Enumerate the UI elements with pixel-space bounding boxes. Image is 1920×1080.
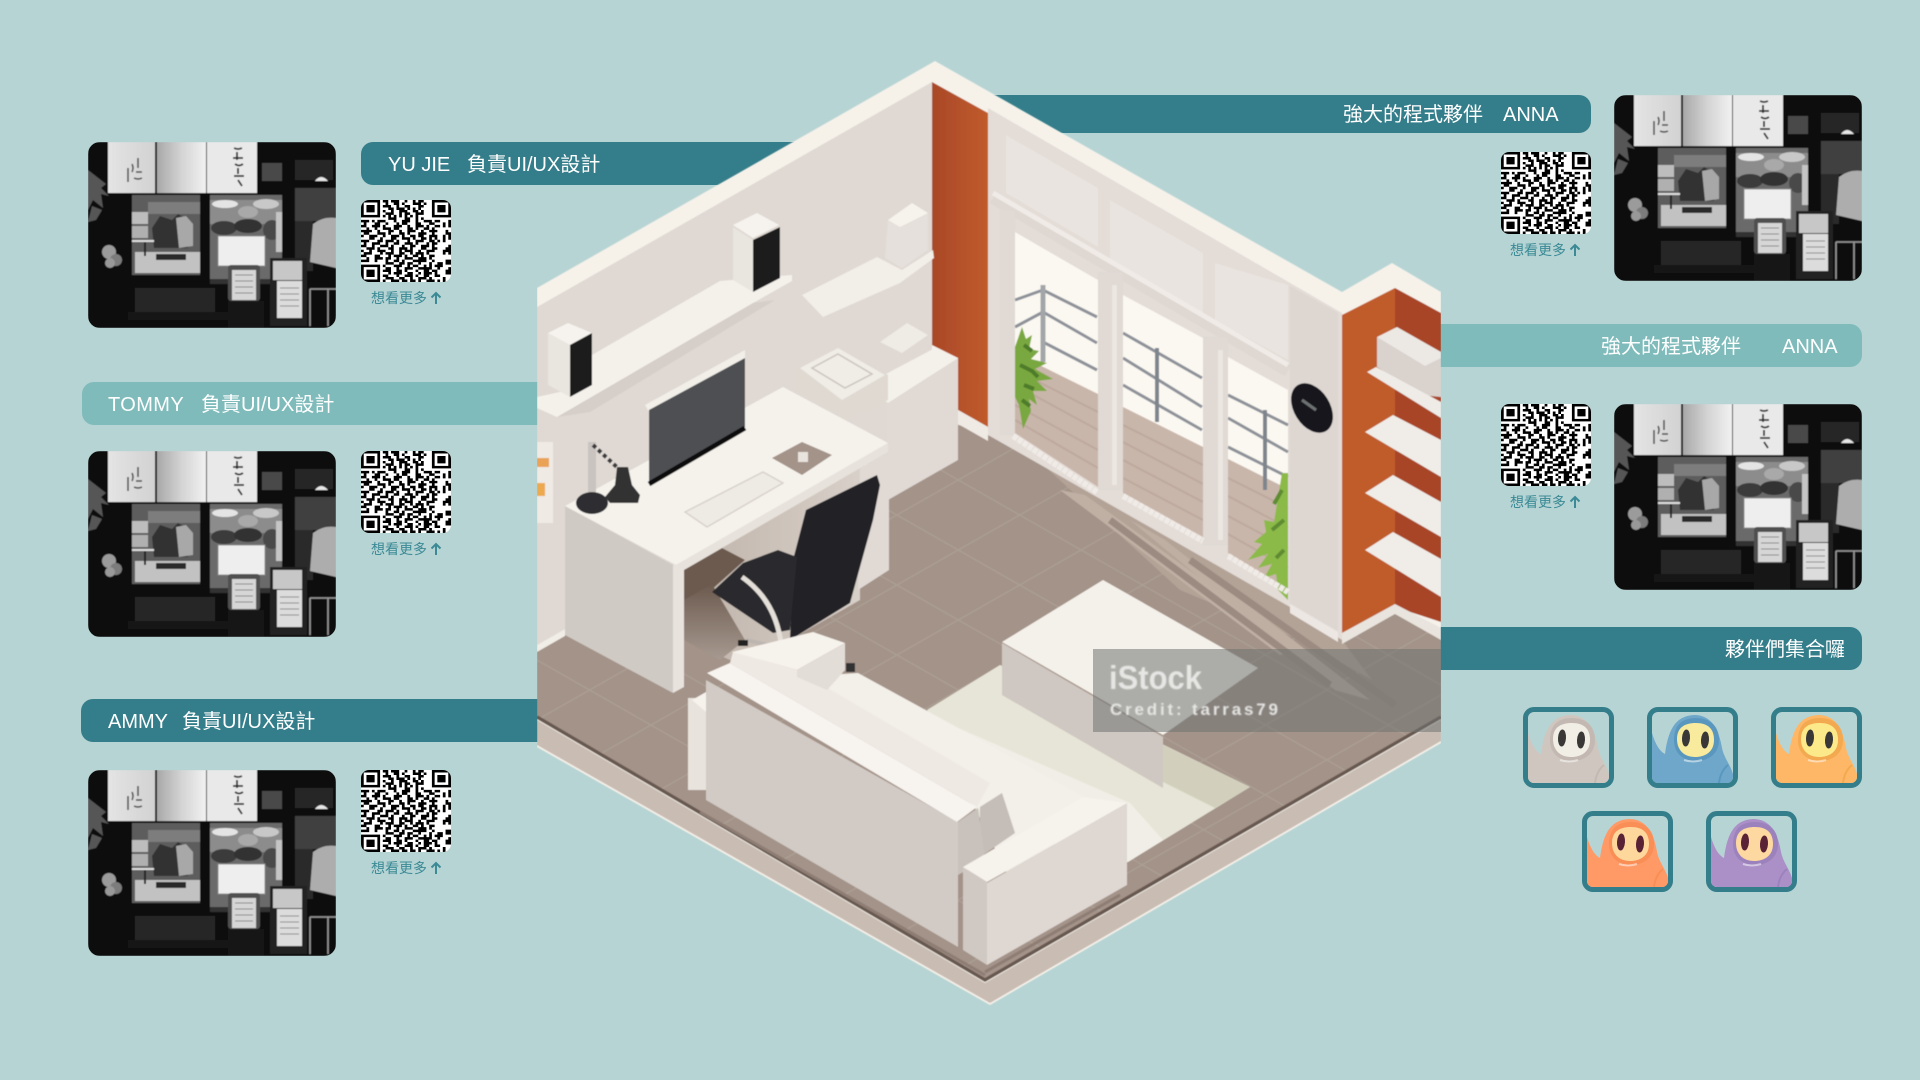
floor edge line: [537, 717, 1441, 980]
monitor: [645, 350, 745, 484]
bar: ANNA second: [1430, 324, 1862, 367]
desk leg right: [858, 443, 889, 590]
window sill: [1013, 436, 1288, 592]
wall shelf upper: [537, 275, 792, 417]
photo: TOMMY: [88, 451, 336, 637]
bar: AMMY: 負責UI/UX設計: [182, 710, 315, 732]
photo: ANNA second: [1614, 404, 1862, 590]
avatar: yellow character: [1771, 707, 1862, 788]
floor slab: [537, 720, 1441, 1003]
window: right pane: [1228, 357, 1288, 590]
speaker right: [733, 213, 780, 292]
link: more ANNA second: 想看更多: [1510, 494, 1566, 510]
link: more ANNA top: 想看更多: [1510, 242, 1566, 258]
avatar: grey character: [1523, 707, 1614, 788]
bar: ANNA second: ANNA: [1782, 336, 1838, 358]
right pier: [1290, 286, 1338, 631]
orange pillar: [932, 82, 988, 427]
paper stack: [880, 323, 928, 353]
office chair: [712, 475, 880, 672]
bar: TOMMY: TOMMY: [108, 394, 184, 416]
window transom bar: [993, 198, 1288, 371]
avatar: purple character: [1706, 811, 1797, 892]
bar: ANNA top: 強大的程式夥伴: [1343, 104, 1483, 126]
watermark: [1093, 649, 1441, 732]
mouse pad: [772, 442, 832, 475]
bar: YU JIE: YU JIE: [388, 154, 450, 176]
avatar: orange character: [1582, 811, 1673, 892]
floor: [537, 424, 1441, 978]
QR code: ANNA second: [1501, 404, 1591, 486]
watermark credit: Credit: tarras79: [1110, 700, 1278, 719]
right wall: [988, 108, 1342, 640]
QR code: ANNA top: [1501, 152, 1591, 234]
bar: TOMMY: 負責UI/UX設計: [201, 394, 334, 416]
window: middle pane: [1123, 295, 1203, 537]
desk front leg: [673, 565, 684, 693]
plant left: [1015, 327, 1053, 429]
photo: AMMY: [88, 770, 336, 956]
ottoman: [1002, 580, 1258, 788]
printer: [800, 348, 888, 401]
bar: TOMMY: [82, 382, 542, 425]
box on shelf: [888, 203, 928, 228]
photo: ANNA top: [1614, 95, 1862, 281]
rug: [927, 665, 1250, 900]
avatar: blue character: [1647, 707, 1738, 788]
QR code: YU JIE: [361, 200, 451, 282]
link: more TOMMY: 想看更多: [371, 541, 427, 557]
QR code: AMMY: [361, 770, 451, 852]
poster on left wall: [537, 442, 553, 523]
cabinet: [886, 350, 959, 500]
bar: team heading: [1430, 627, 1862, 670]
bar: AMMY: [81, 699, 541, 742]
desk lamp: [576, 442, 640, 514]
transom panels: [1114, 260, 1141, 276]
bar: team heading: 夥伴們集合囉: [1725, 638, 1845, 660]
desk top: [565, 387, 888, 565]
bar: ANNA top: ANNA: [1503, 104, 1559, 126]
watermark brand: iStock: [1109, 659, 1203, 696]
left wall: [537, 82, 932, 645]
wall shelf right: [802, 250, 934, 317]
bar: YU JIE: [361, 142, 801, 185]
photo: YU JIE: [88, 142, 336, 328]
sofa: [688, 632, 1127, 965]
link: more AMMY: 想看更多: [371, 860, 427, 876]
room shell: [537, 61, 1441, 1005]
bar: ANNA second: 強大的程式夥伴: [1601, 336, 1741, 358]
link: more YU JIE: 想看更多: [371, 290, 427, 306]
bar: ANNA top: [990, 95, 1591, 133]
under desk shadow: [714, 468, 860, 660]
QR code: TOMMY: [361, 451, 451, 533]
illustration: isometric room: [537, 60, 1441, 1006]
bar: AMMY: AMMY: [108, 710, 168, 732]
shelf shadow: [557, 300, 775, 417]
window mullions: [1014, 298, 1228, 448]
wall clock: [1290, 382, 1334, 434]
desk side panel: [565, 506, 673, 693]
orange shelving alcove: [1342, 288, 1441, 644]
window: left pane: [1015, 232, 1098, 487]
keyboard: [685, 472, 783, 527]
plant right: [1248, 473, 1288, 600]
bar: YU JIE: 負責UI/UX設計: [467, 154, 600, 176]
speaker left: [548, 323, 592, 397]
